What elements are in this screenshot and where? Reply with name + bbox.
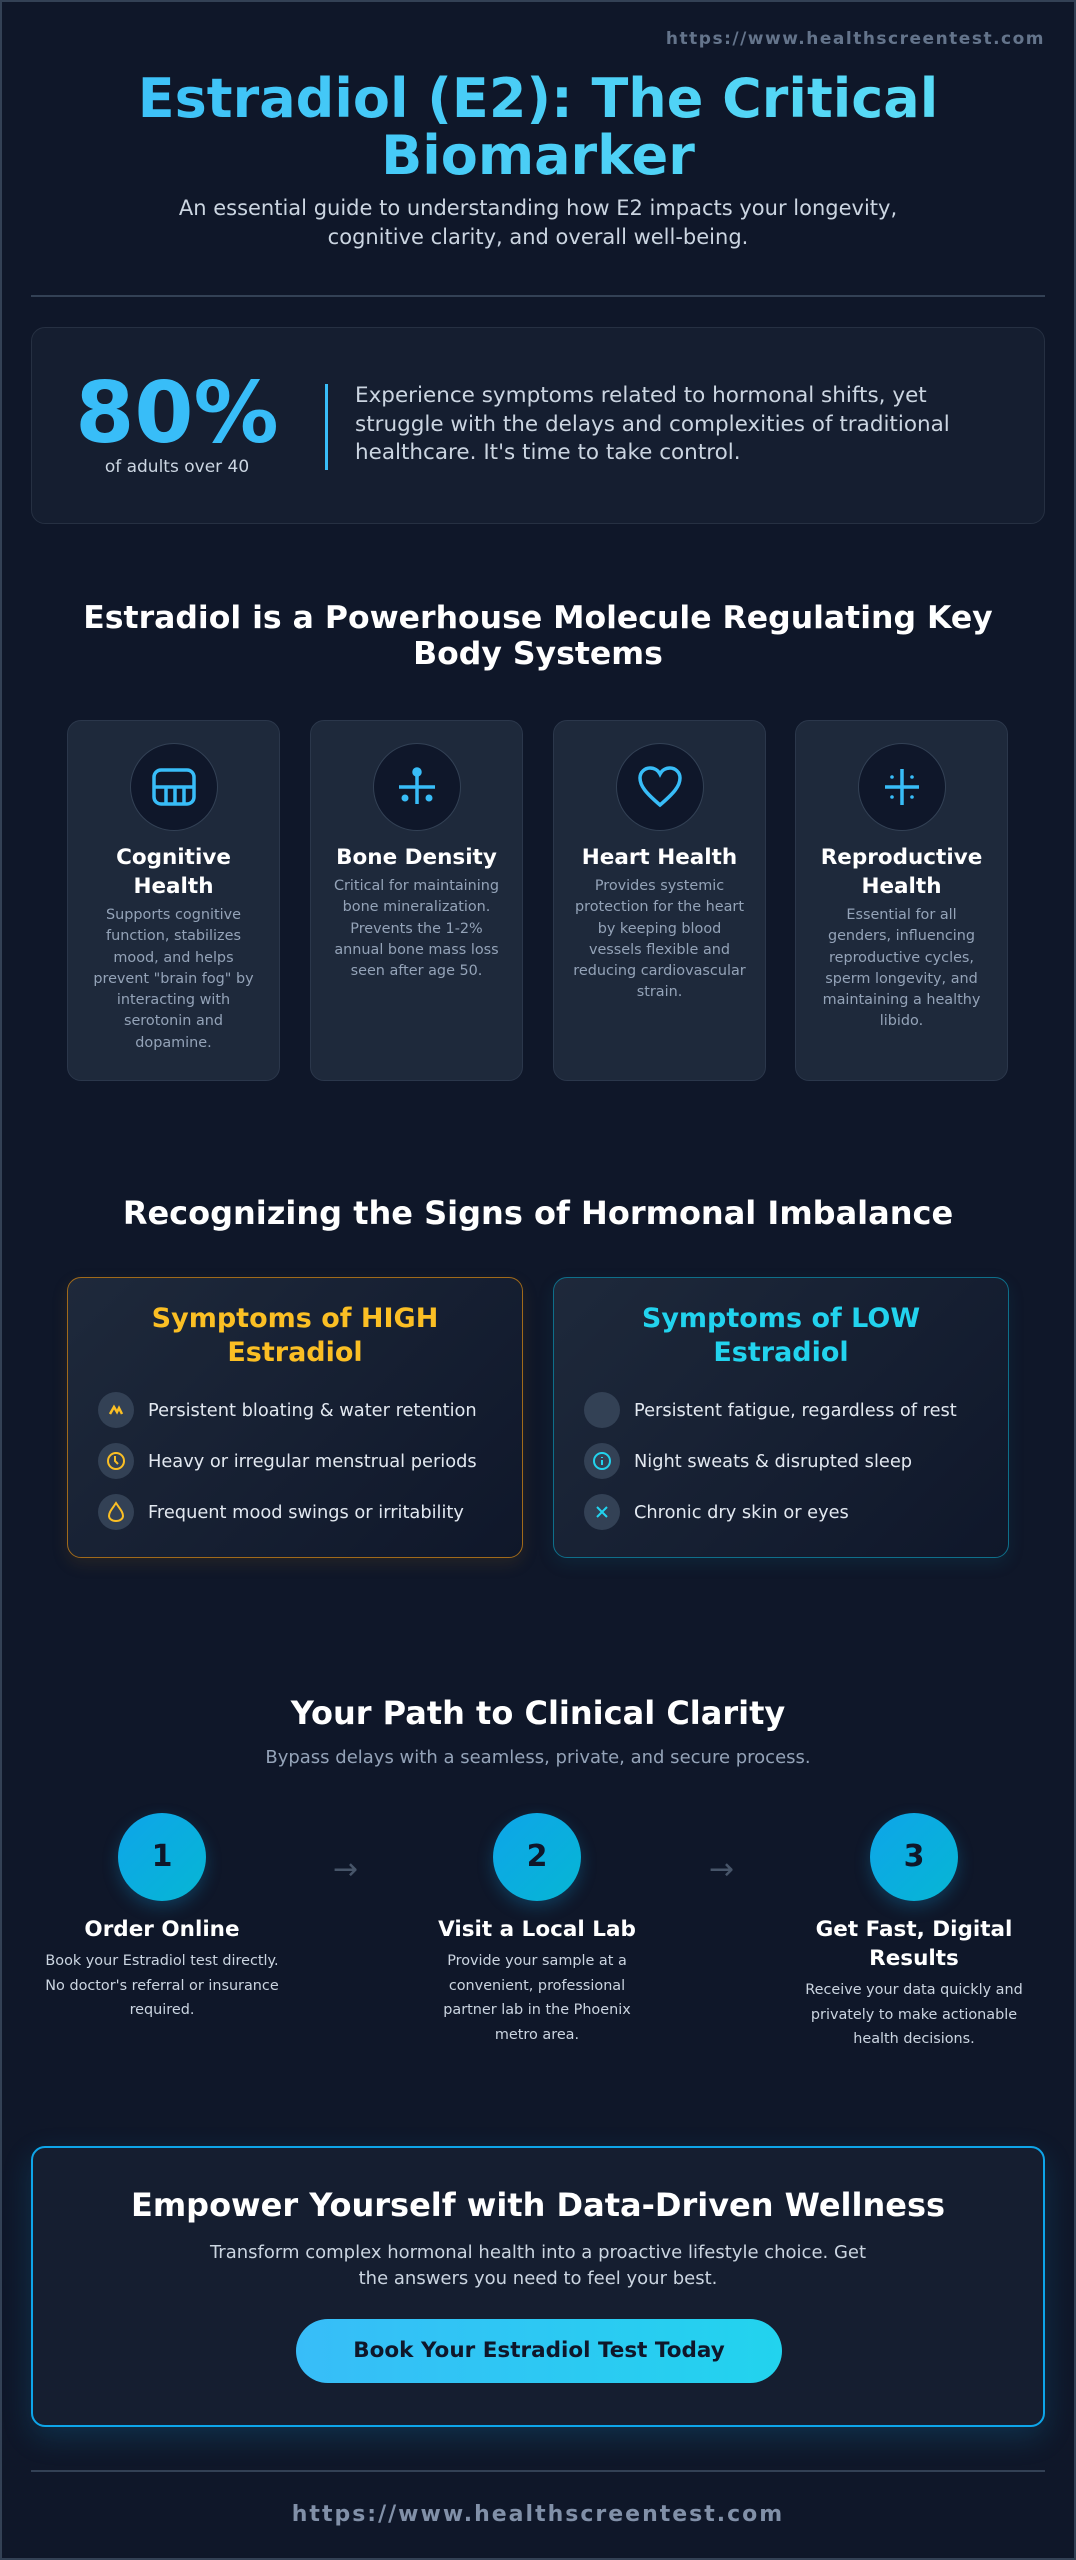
card: cognitive	[67, 720, 280, 1081]
card: bone	[310, 720, 523, 1081]
panel: low estradiol: Estradiol	[713, 1337, 849, 1368]
heading: path: Your Path to Clinical Clarity	[291, 1694, 785, 1732]
item: mood: Frequent mood swings or irritability	[148, 1502, 464, 1522]
item: periods: Heavy or irregular menstrual periods	[148, 1450, 477, 1472]
step 1: Book your Estradiol test directly. No doctor's referral or insurance required.	[45, 1953, 279, 2018]
card: bone: Bone Density	[336, 845, 497, 870]
subtitle: path: Bypass delays with a seamless, private, and secure process.	[265, 1747, 811, 1768]
step 1: 1	[152, 1839, 172, 1874]
panel: low estradiol	[553, 1277, 1009, 1558]
item: mood	[98, 1494, 464, 1530]
step 3: Get Fast, Digital	[816, 1917, 1012, 1942]
heading: signs: Recognizing the Signs of Hormonal Imbalance	[123, 1194, 953, 1232]
card: reproductive: Reproductive	[821, 845, 982, 870]
icon: reproductive	[858, 743, 946, 831]
panel: low estradiol: Symptoms of LOW	[642, 1303, 920, 1334]
title: Estradiol (E2): The Critical	[138, 67, 938, 130]
subtitle: An essential guide to understanding how E2 impacts your longevity, cognitive clarity, and overall well-being.	[179, 196, 897, 249]
card: bone: Critical for maintaining bone mineralization. Prevents the 1-2% annual bone mass loss seen after age 50.	[334, 878, 499, 979]
step 1: Order Online	[84, 1917, 240, 1942]
arrow 2: →	[709, 1852, 734, 1887]
item: periods	[98, 1443, 477, 1479]
card: cognitive: Health	[133, 874, 214, 899]
panel: high estradiol: Estradiol	[227, 1337, 363, 1368]
card: heart: Heart Health	[582, 845, 737, 870]
panel: cta	[31, 2146, 1045, 2427]
icon: heart	[616, 743, 704, 831]
item: bloating	[98, 1392, 477, 1428]
footer url: https://www.healthscreentest.com	[292, 2502, 784, 2527]
step 2: Visit a Local Lab	[438, 1917, 636, 1942]
panel: high estradiol: Symptoms of HIGH	[152, 1303, 438, 1334]
item: fatigue	[584, 1392, 957, 1428]
cta button: Book Your Estradiol Test Today	[353, 2338, 725, 2363]
step 3: Results	[869, 1946, 959, 1971]
icon: bone	[373, 743, 461, 831]
step 2: Provide your sample at a convenient, professional partner lab in the Phoenix metro area.	[443, 1953, 631, 2042]
item: bloating: Persistent bloating & water retention	[148, 1400, 477, 1420]
item: sweats	[584, 1443, 912, 1479]
panel: high estradiol	[67, 1277, 523, 1558]
title	[0, 70, 1076, 184]
step 3	[805, 1812, 1023, 2047]
card: heart	[553, 720, 766, 1081]
item: fatigue: Persistent fatigue, regardless of rest	[634, 1400, 957, 1420]
cta button	[296, 2319, 782, 2383]
card: reproductive: Health	[861, 874, 942, 899]
card: cognitive: Cognitive	[116, 845, 231, 870]
item: dry skin: Chronic dry skin or eyes	[634, 1502, 849, 1522]
stat caption: of adults over 40	[105, 457, 249, 477]
stat number: 80%	[75, 364, 279, 463]
card: reproductive: Essential for all genders, influencing reproductive cycles, sperm longevity, and maintaining a healthy libido.	[823, 907, 980, 1029]
card: heart: Provides systemic protection for the heart by keeping blood vessels flexible and reducing cardiovascular strain.	[573, 878, 746, 1000]
stat text: Experience symptoms related to hormonal shifts, yet struggle with the delays and complexities of traditional healthcare. It's time to take control.	[355, 383, 950, 465]
card: cognitive: Supports cognitive function, stabilizes mood, and helps prevent "brain fog" by interacting with serotonin and dopamine.	[93, 907, 254, 1051]
step 2	[438, 1812, 636, 2042]
title: Biomarker	[381, 124, 695, 187]
step 3: Receive your data quickly and privately to make actionable health decisions.	[805, 1982, 1023, 2047]
heading: powerhouse: Estradiol is a Powerhouse Molecule Regulating Key Body Systems	[83, 600, 993, 672]
arrow 1: →	[333, 1852, 358, 1887]
icon: brain	[130, 743, 218, 831]
cta text: Transform complex hormonal health into a proactive lifestyle choice. Get the answers you need to feel your best.	[210, 2242, 866, 2289]
panel: stat	[31, 327, 1045, 524]
card: reproductive	[795, 720, 1008, 1081]
step 3: 3	[904, 1839, 924, 1874]
item: sweats: Night sweats & disrupted sleep	[634, 1450, 912, 1472]
item: dry skin	[584, 1494, 849, 1530]
cta heading: Empower Yourself with Data-Driven Wellness	[131, 2186, 945, 2224]
step 1	[45, 1812, 279, 2018]
header url: https://www.healthscreentest.com	[666, 29, 1045, 49]
step 2: 2	[527, 1839, 547, 1874]
